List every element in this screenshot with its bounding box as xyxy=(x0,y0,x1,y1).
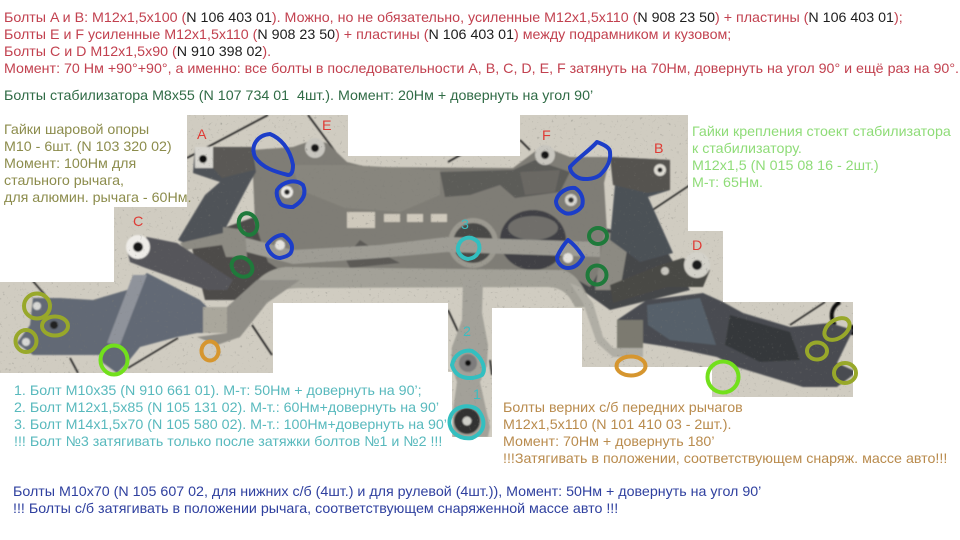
text: stabilizer bolts: Болты стабилизатора M8x55 (N 107 734 01 4шт.). Момент: 20Нм + довернуть на угол 90’ xyxy=(4,88,593,104)
marks: subframe bolts (blue) xyxy=(253,134,610,268)
center mount link xyxy=(451,280,490,437)
right bushing xyxy=(617,320,643,348)
photo labels: bolt numbers: 3 xyxy=(461,217,469,233)
marks: upper bushing bolts (orange) xyxy=(202,342,646,376)
text: ball joint nuts: M10 - 6шт. (N 103 320 02) xyxy=(4,139,172,155)
text: central mount bolts: !!! Болт №3 затягивать только после затяжки болтов №1 и №2 !!! xyxy=(14,434,442,450)
holes in left arm xyxy=(33,302,41,310)
ball joint knob left xyxy=(180,227,247,257)
text: central mount bolts: 3. Болт M14x1,5x70 (N 105 580 02). М-т.: 100Нм+довернуть на 90’ xyxy=(14,417,447,433)
text: ball joint nuts: Момент: 100Нм для xyxy=(4,156,136,172)
bracket B block xyxy=(610,157,673,262)
bright bolt rings xyxy=(281,186,293,198)
text: stabilizer link nuts xyxy=(692,124,951,191)
text: stabilizer link nuts: Гайки крепления стоект стабилизатора xyxy=(692,124,951,140)
dark underside behind ribs xyxy=(192,217,278,301)
bolt F mount xyxy=(535,145,555,165)
left bushing xyxy=(203,307,227,333)
photo labels: bolt letters: A xyxy=(197,127,207,143)
photo labels: bolt numbers xyxy=(461,217,481,403)
text: ball joint nuts: Гайки шаровой опоры xyxy=(4,122,149,138)
text: stabilizer link nuts: к стабилизатору. xyxy=(692,141,802,157)
bracket C arm xyxy=(127,237,233,290)
photo labels: bolt letters xyxy=(133,118,702,254)
left lower arm xyxy=(17,273,207,373)
photo background: floor tiles xyxy=(0,110,860,440)
photo labels: bolt letters: B xyxy=(654,141,664,157)
bracket D arm xyxy=(610,257,711,291)
line: bolts A and B: Болты A и B: M12x1,5x100 (N 106 403 01). Можно, но не обязательно, усиленные M12x1,5x110 (N 908 23 50) + пластины (N 106 403 01); xyxy=(4,10,903,26)
central round opening xyxy=(448,218,498,268)
text: ball joint nuts: стального рычага, xyxy=(4,173,124,189)
line: bolts E and F: Болты E и F усиленные M12x1,5x110 (N 908 23 50) + пластины (N 106 403 01) между подрамником и кузовом; xyxy=(4,27,731,43)
photo: front subframe with control arms xyxy=(0,110,860,440)
right gray tube xyxy=(570,283,643,357)
photo texture: speckle xyxy=(0,110,860,440)
photo labels: bolt letters: D xyxy=(692,238,702,254)
main crossmember plate xyxy=(252,140,610,287)
right inner ribs xyxy=(595,233,630,290)
stabilizer bar xyxy=(243,237,600,264)
text: central mount bolts xyxy=(14,383,447,450)
marks: stabilizer link nuts (lime) xyxy=(100,346,738,392)
slots in plate xyxy=(347,212,447,228)
bracket A and left arm xyxy=(178,147,256,246)
large hole in plate xyxy=(500,210,566,270)
left gray link bracket xyxy=(197,280,300,345)
text: ball joint nuts xyxy=(4,122,192,206)
text: upper bushing bolts xyxy=(503,400,947,467)
right lower arm xyxy=(617,293,857,387)
photo labels: bolt letters: F xyxy=(542,128,551,144)
photo labels: bolt letters: C xyxy=(133,214,143,230)
line: torque: Момент: 70 Нм +90°+90°, а именно: все болты в последовательности A, B, C, D, E, F затянуть на 70Нм, довернуть на угол 90° и ещё раз на 90°. xyxy=(4,61,959,77)
text: upper bushing bolts: Болты верних с/б передних рычагов xyxy=(503,400,743,416)
text: lower bushing and steering bolts xyxy=(13,484,761,517)
bolt E mount xyxy=(305,138,325,158)
bottom rail xyxy=(243,267,593,307)
text: stabilizer link nuts: М-т: 65Нм. xyxy=(692,175,763,191)
photo labels: bolt numbers: 1 xyxy=(473,387,481,403)
text: stabilizer link nuts: M12x1,5 (N 015 08 16 - 2шт.) xyxy=(692,158,879,174)
text: lower bushing and steering bolts: !!! Болты с/б затягивать в положении рычага, соответствующем снаряженной массе авто !!! xyxy=(13,501,618,517)
marks: central mount bolts (teal) xyxy=(450,238,484,438)
photo labels: bolt letters: E xyxy=(322,118,332,134)
text: upper bushing bolts: M12x1,5x110 (N 101 410 03 - 2шт.). xyxy=(503,417,731,433)
text: upper bushing bolts: !!!Затягивать в положении, соответствующем снаряж. массе авто!!! xyxy=(503,451,947,467)
text: central mount bolts: 2. Болт M12x1,5x85 (N 105 131 02). М-т.: 60Нм+довернуть на 90’ xyxy=(14,400,439,416)
text: upper bushing bolts: Момент: 70Нм + довернуть 180’ xyxy=(503,434,715,450)
marks: stabilizer bolts (dark green) xyxy=(228,211,607,284)
text: ball joint nuts: для алюмин. рычага - 60Нм. xyxy=(4,190,192,206)
text: lower bushing and steering bolts: Болты M10x70 (N 105 607 02, для нижних с/б (4шт.) и для рулевой (4шт.)), Момент: 50Нм + довернуть на угол 90’ xyxy=(13,484,761,500)
marks: ball joint nuts (olive) xyxy=(16,294,856,383)
heading: subframe bolts xyxy=(4,10,959,77)
photo labels: bolt numbers: 2 xyxy=(463,324,471,340)
text: central mount bolts: 1. Болт M10x35 (N 910 661 01). М-т: 50Нм + довернуть на 90’; xyxy=(14,383,422,399)
line: bolts C and D: Болты C и D M12x1,5x90 (N 910 398 02). xyxy=(4,44,271,60)
